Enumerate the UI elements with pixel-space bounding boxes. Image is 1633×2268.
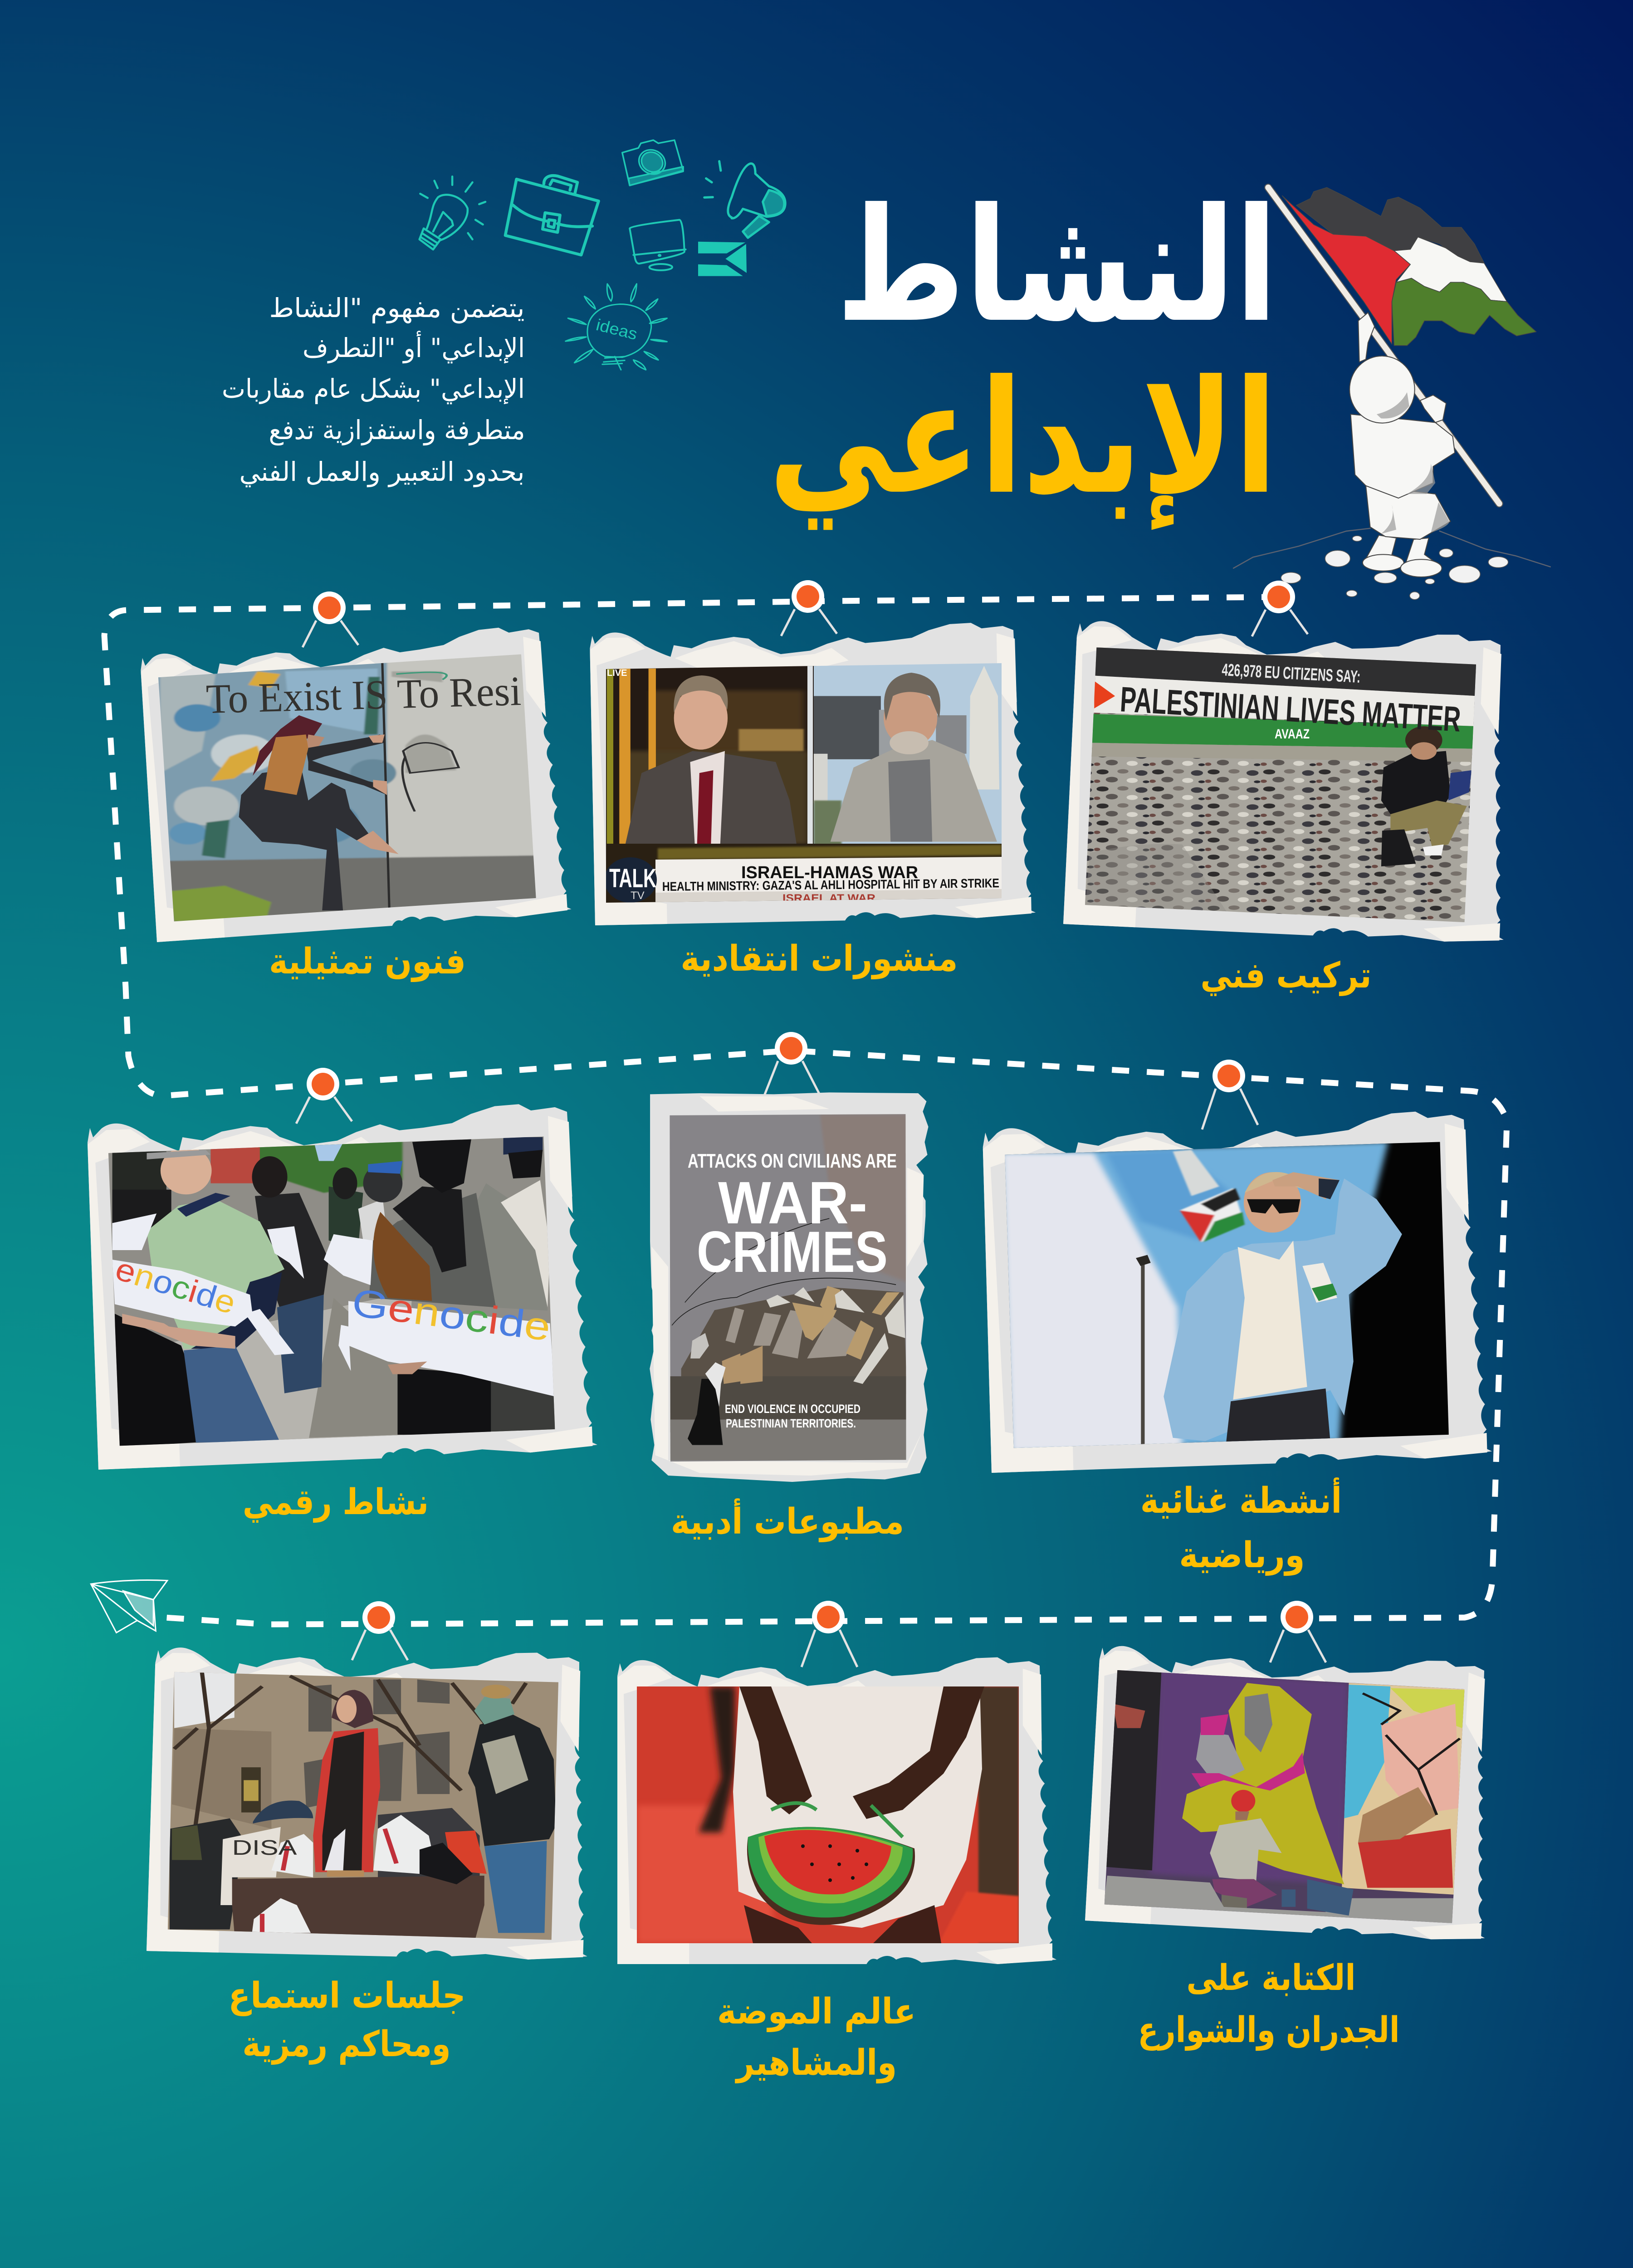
title (768, 175, 1277, 531)
panel: graffiti and street art (1085, 1642, 1500, 1942)
photo frame (1063, 617, 1518, 944)
woman walking (688, 1362, 726, 1445)
caption: music and sports: أنشطة غنائية (1140, 1477, 1342, 1521)
photo: Genocide bundles (103, 1132, 560, 1451)
white body bundles (112, 1213, 555, 1397)
intro text block: الإبداعي" بشكل عام مقاربات (222, 373, 525, 405)
pin 4 (296, 1068, 352, 1124)
caption: fashion and celebrities (717, 1991, 916, 2083)
icon: camera (622, 140, 683, 186)
photo: shoes installation (1081, 644, 1483, 924)
watermelon bag (747, 1803, 915, 1925)
panel: art installation (1063, 617, 1518, 944)
pin 6 (1202, 1060, 1258, 1129)
ticker band: HEALTH MINISTRY: GAZA'S AL AHLI HOSPITAL HIT BY AIR STRIKE (662, 876, 999, 894)
intro text block: يتضمن مفهوم "النشاط (269, 293, 524, 324)
sign (220, 1827, 281, 1905)
icon: megaphone (704, 161, 785, 238)
icon: paper plane (91, 1580, 167, 1633)
poster title line 1: WAR- (718, 1169, 867, 1236)
caption: graffiti and street art (1138, 1958, 1400, 2051)
pin 8 (802, 1601, 857, 1667)
pin 7 (352, 1601, 408, 1660)
money bags (252, 1815, 431, 1933)
flag (1282, 187, 1536, 346)
photo: singer on stage (1002, 1139, 1455, 1451)
title line 2: yellow: الإبداعي (768, 347, 1277, 531)
caption: music and sports: ورياضية (1179, 1535, 1305, 1576)
photo: war crimes poster: PALESTINIAN TERRITORIES. (726, 1417, 856, 1430)
painter (1210, 1790, 1282, 1910)
photo: watermelon bag (637, 1686, 1019, 1943)
icon: briefcase (505, 176, 599, 255)
bundle text left: enocide (112, 1251, 240, 1321)
big flag badge (1173, 1150, 1245, 1242)
caption: hearings and mock trials: ومحاكم رمزية (242, 2024, 451, 2065)
man in green t-shirt (147, 1147, 284, 1442)
photo frame (650, 1092, 929, 1482)
mural figures (1182, 1683, 1344, 1884)
photo: war crimes poster (668, 1112, 909, 1468)
panel: digital activism (87, 1101, 597, 1470)
caption: literary prints: مطبوعات أدبية (671, 1498, 904, 1542)
pin 1 (303, 591, 358, 647)
pin 9 (1270, 1601, 1326, 1662)
collapsed building (670, 1286, 907, 1460)
panel: performance art (140, 624, 572, 942)
ticker band: TV (631, 890, 645, 902)
pin 2 (781, 580, 837, 636)
ticker band: ISRAEL-HAMAS WAR (741, 863, 918, 882)
umbrella (253, 1800, 313, 1823)
mic stand (1141, 1263, 1144, 1444)
caption: digital activism: نشاط رقمي (243, 1482, 429, 1523)
dancer figure (239, 715, 399, 910)
photo: mock trial protest: DISA (232, 1836, 297, 1859)
caption: critical publications: منشورات انتقادية (680, 938, 958, 979)
photo frame (982, 1110, 1492, 1473)
caption: hearings and mock trials (229, 1975, 465, 2065)
intro text block: متطرفة واستفزازية تدفع (269, 415, 525, 446)
panel: music and sports (982, 1110, 1492, 1473)
pedestal (230, 1876, 484, 1940)
photo frame (140, 624, 572, 942)
intro text block (222, 293, 525, 488)
poster headline: ATTACKS ON CIVILIANS ARE (688, 1150, 897, 1172)
ideas label: ideas (594, 315, 639, 343)
arms and hands (739, 1686, 984, 1819)
caption: fashion and celebrities: عالم الموضة (717, 1991, 916, 2032)
caption: art installation: تركيب فني (1200, 955, 1372, 996)
panel: hearings and mock trials (147, 1644, 596, 1961)
graffiti text: To Exist IS To Resi (205, 668, 522, 722)
sidewalk (1104, 1876, 1455, 1924)
caption: graffiti and street art: الجدران والشوارع (1138, 2010, 1400, 2051)
poster title line 2: CRIMES (697, 1220, 888, 1285)
backpack person (468, 1685, 556, 1933)
ground line and rocks (1233, 528, 1550, 600)
caption: performance art: فنون تمثيلية (269, 941, 466, 982)
panel: fashion and celebrities (617, 1657, 1056, 1964)
caption: hearings and mock trials: جلسات استماع (229, 1975, 465, 2016)
ticker band (604, 668, 1005, 905)
icon: ideas bulb (566, 284, 667, 370)
Handala figure (1349, 313, 1455, 577)
photo: mock trial protest (165, 1669, 563, 1943)
icon: envelope (698, 242, 747, 276)
captions (229, 938, 1400, 2083)
title line 1: white: النشاط (836, 175, 1277, 357)
illustration: Handala holding Palestinian flag (1233, 187, 1550, 600)
dashed route line (104, 597, 1507, 1624)
photo frame (1085, 1642, 1500, 1942)
cutout figure (313, 1690, 380, 1877)
kneeling woman (1381, 726, 1472, 866)
intro text block: بحدود التعبير والعمل الفني (240, 456, 524, 488)
bundle text right: Genocide (350, 1281, 553, 1349)
ticker band: LIVE (607, 668, 627, 678)
caption: graffiti and street art: الكتابة على (1187, 1958, 1355, 1999)
photo frame (87, 1101, 597, 1470)
icon: monitor (630, 220, 686, 270)
panel: critical publications (590, 622, 1036, 925)
right figures (369, 1137, 555, 1435)
photo: dancer on wall (151, 649, 544, 924)
performer (1164, 1172, 1402, 1442)
photo: news interview (600, 658, 1008, 905)
pins (296, 580, 1326, 1667)
caption: music and sports (1140, 1477, 1342, 1576)
photo frame (617, 1657, 1056, 1964)
banner main text: PALESTINIAN LIVES MATTER (1119, 679, 1462, 739)
poster footer: END VIOLENCE IN OCCUPIED (725, 1402, 861, 1416)
panel: literary prints (650, 1092, 929, 1482)
ticker band: TALK (609, 864, 656, 893)
photo: street mural (1099, 1666, 1469, 1930)
flag pole (1268, 187, 1499, 503)
caption: fashion and celebrities: والمشاهير (734, 2043, 897, 2083)
banner small text: 426,978 EU CITIZENS SAY: (1222, 660, 1361, 687)
icons cluster (420, 140, 785, 370)
ticker band: ISRAEL AT WAR (782, 892, 875, 904)
photo frame (590, 622, 1036, 925)
pin 5 (764, 1032, 820, 1095)
intro text block: الإبداعي" أو "التطرف (303, 331, 525, 364)
icon: light bulb (420, 176, 485, 249)
photo frame (147, 1644, 596, 1961)
pin 3 (1252, 581, 1308, 636)
banner logo: AVAAZ (1275, 727, 1310, 742)
